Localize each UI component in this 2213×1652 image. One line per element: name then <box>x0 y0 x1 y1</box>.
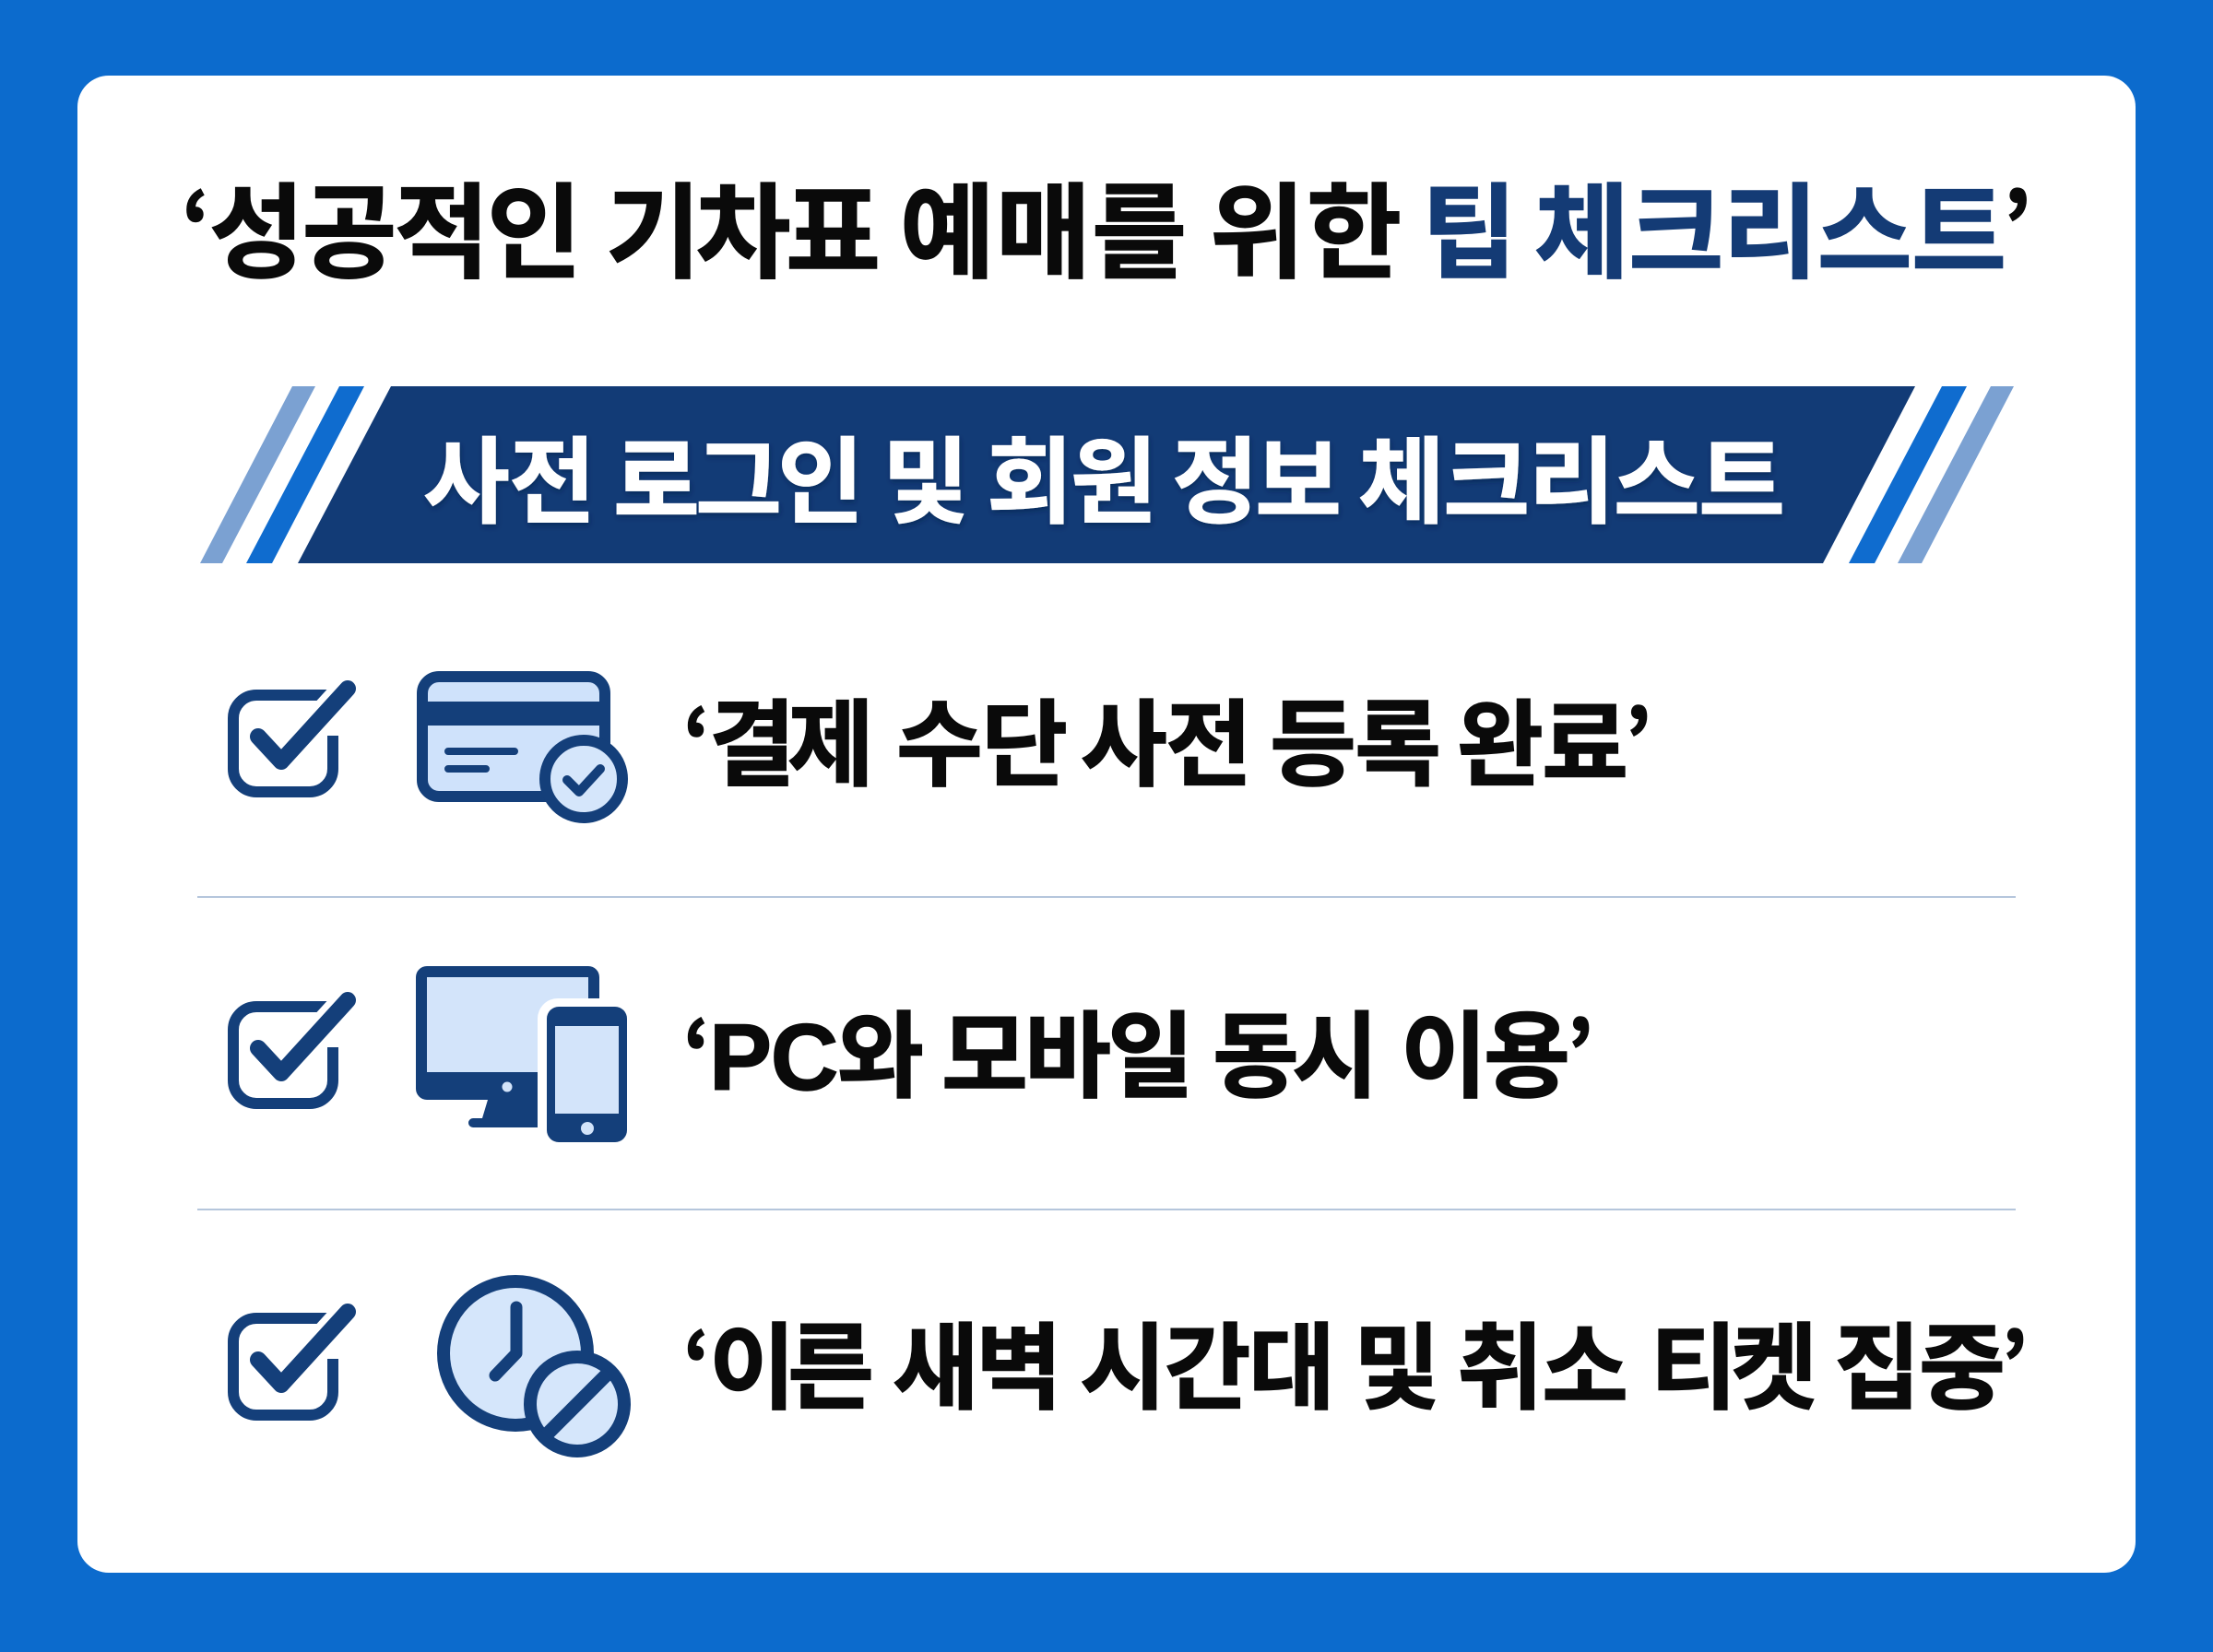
row 3 text: 집중 <box>1834 1316 2006 1422</box>
row 2: devices <box>233 966 1593 1155</box>
row 3 text: 및 <box>1354 1316 1440 1422</box>
row 3 text: ’ <box>2001 1298 2028 1418</box>
banner heading: 및 <box>882 431 969 536</box>
row 1 text: 수단 <box>896 693 1068 798</box>
row 2 text: ‘ <box>683 986 710 1106</box>
row 2 text: PC와 <box>709 1005 924 1110</box>
row 3 text: 새벽 <box>893 1316 1062 1422</box>
row 2 text: ’ <box>1567 986 1593 1106</box>
banner stripe: inner right <box>1849 386 1967 563</box>
checkbox 3 <box>233 1312 348 1415</box>
icon: clock and prohibition <box>444 1281 624 1451</box>
title: 위한 <box>1210 176 1402 291</box>
checkbox 1 <box>233 689 348 792</box>
title: ’ <box>2003 156 2031 284</box>
title: 성공적인 <box>209 176 582 291</box>
row 3 text: 이른 <box>709 1316 874 1422</box>
row 3: time <box>233 1281 2028 1451</box>
title <box>182 156 2031 291</box>
row 3 text: 시간대 <box>1080 1316 1335 1422</box>
row 2 text <box>683 986 1593 1110</box>
row 1: payment <box>233 675 1651 818</box>
banner body <box>298 386 1915 563</box>
row 3 text: 취소 <box>1457 1316 1628 1422</box>
title: 팁 <box>1422 176 1517 291</box>
row 1 text: 사전 <box>1081 693 1252 798</box>
banner heading: 정보 <box>1172 431 1342 536</box>
icon: monitor and phone <box>416 966 636 1155</box>
icon: credit card with check <box>422 677 622 818</box>
row 1 text: ‘ <box>683 675 710 795</box>
banner stripe: far left <box>200 386 315 563</box>
divider <box>197 1209 2016 1210</box>
banner heading: 체크리스트 <box>1358 431 1785 536</box>
divider <box>197 896 2016 898</box>
row 1 text: ’ <box>1625 675 1651 795</box>
title: 예매를 <box>900 176 1187 291</box>
row 1 text <box>683 675 1651 798</box>
banner stripe: inner left <box>246 386 364 563</box>
row 2 text: 동시 <box>1213 1005 1379 1110</box>
row 2 text: 이용 <box>1401 1005 1570 1110</box>
banner heading: 회원 <box>987 431 1157 536</box>
row 3 text: ‘ <box>683 1298 710 1418</box>
row 3 text: 티켓 <box>1651 1316 1817 1422</box>
row 1 text: 완료 <box>1457 693 1628 798</box>
title: 기차표 <box>606 176 881 291</box>
checkbox 2 <box>233 1000 348 1103</box>
title: 체크리스트 <box>1534 176 2006 291</box>
row 1 text: 등록 <box>1270 693 1441 798</box>
section banner <box>200 386 2014 563</box>
banner stripe: far right <box>1898 386 2014 563</box>
banner heading <box>423 431 1785 536</box>
row 2 text: 모바일 <box>941 1005 1194 1110</box>
row 1 text: 결제 <box>709 693 874 798</box>
row 3 text <box>683 1298 2028 1422</box>
title: ‘ <box>182 156 210 284</box>
banner heading: 사전 <box>423 431 596 536</box>
banner heading: 로그인 <box>613 431 864 536</box>
